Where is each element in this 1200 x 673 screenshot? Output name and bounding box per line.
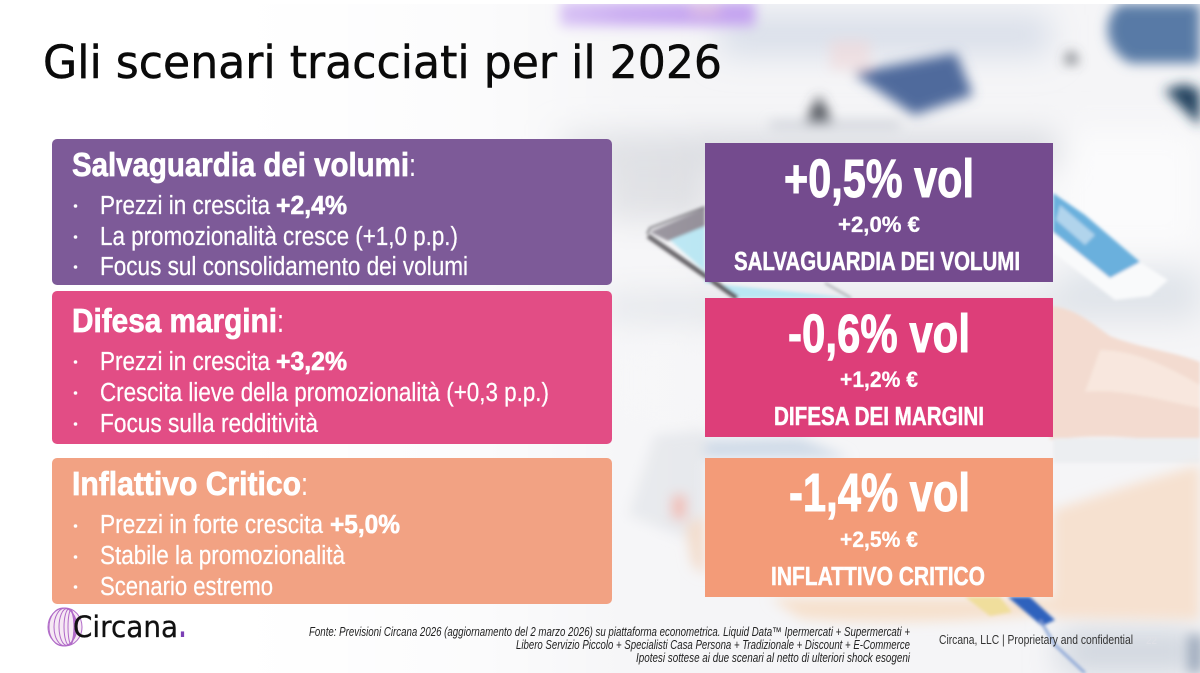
result card: salvaguardia [705,143,1053,282]
panel: salvaguardia dei volumi: +2,4% [276,190,347,220]
panel: inflattivo critico: : [301,466,308,502]
page number: 22 [1146,635,1157,647]
result card: inflattivo: -1,4% vol [789,463,970,523]
result card: difesa: DIFESA DEI MARGINI [774,403,984,431]
panel: difesa margini [52,291,612,444]
panel: salvaguardia dei volumi: Prezzi in crescita [100,192,271,220]
source note: Fonte: Previsioni Circana 2026 (aggiornamento del 2 marzo 2026) su piattaforma econometrica. Liquid Data™ Ipermercati + Supermercati + [309,625,910,639]
lower arm and pen [628,430,1200,673]
panel: inflattivo critico: Stabile la promozionalità [100,542,346,570]
source note: Libero Servizio Piccolo + Specialisti Casa Persona + Tradizionale + Discount + E-Commerce [516,638,910,652]
panel: salvaguardia dei volumi: La promozionalità cresce (+1,0 p.p.) [100,223,458,251]
logo: circana: . [179,610,186,644]
heading: inflattivo critico: Inflattivo Critico [72,465,301,502]
result card: difesa: +1,2% € [840,367,918,392]
heading: salvaguardia: Salvaguardia dei volumi [72,146,409,183]
result card: difesa [705,298,1053,437]
result card: inflattivo: INFLATTIVO CRITICO [771,563,985,591]
result card: inflattivo [705,458,1053,597]
panel: difesa margini: Crescita lieve della promozionalità (+0,3 p.p.) [100,379,549,407]
panel: inflattivo critico: Scenario estremo [100,573,273,601]
title: Gli scenari tracciati per il 2026 [43,36,722,89]
panel: inflattivo critico: Prezzi in forte crescita [100,511,324,539]
result card: difesa: -0,6% vol [788,304,970,364]
panel: difesa margini: Prezzi in crescita [100,348,271,376]
panel: difesa margini: : [277,303,284,339]
confidentiality footer: Circana, LLC | Proprietary and confidential [939,633,1133,647]
panel: inflattivo critico: +5,0% [330,509,400,539]
logo: circana: Circana [73,610,178,644]
result card: salvaguardia: SALVAGUARDIA DEI VOLUMI [734,248,1020,276]
panel: difesa margini: +3,2% [276,346,347,376]
upper right hand [1050,306,1200,463]
heading: difesa margini: Difesa margini [72,302,277,339]
source note [309,625,911,665]
panel: difesa margini: Focus sulla redditività [100,410,319,438]
result card: inflattivo: +2,5% € [840,527,918,552]
source note: Ipotesi sottese ai due scenari al netto di ulteriori shock esogeni [636,651,911,665]
panel: salvaguardia dei volumi: : [409,147,416,183]
result card: salvaguardia: +2,0% € [838,212,920,237]
panel: inflattivo critico [52,458,612,604]
result card: salvaguardia: +0,5% vol [784,149,974,209]
panel: salvaguardia dei volumi: Focus sul consolidamento dei volumi [100,253,468,281]
panel: salvaguardia dei volumi [52,139,612,285]
